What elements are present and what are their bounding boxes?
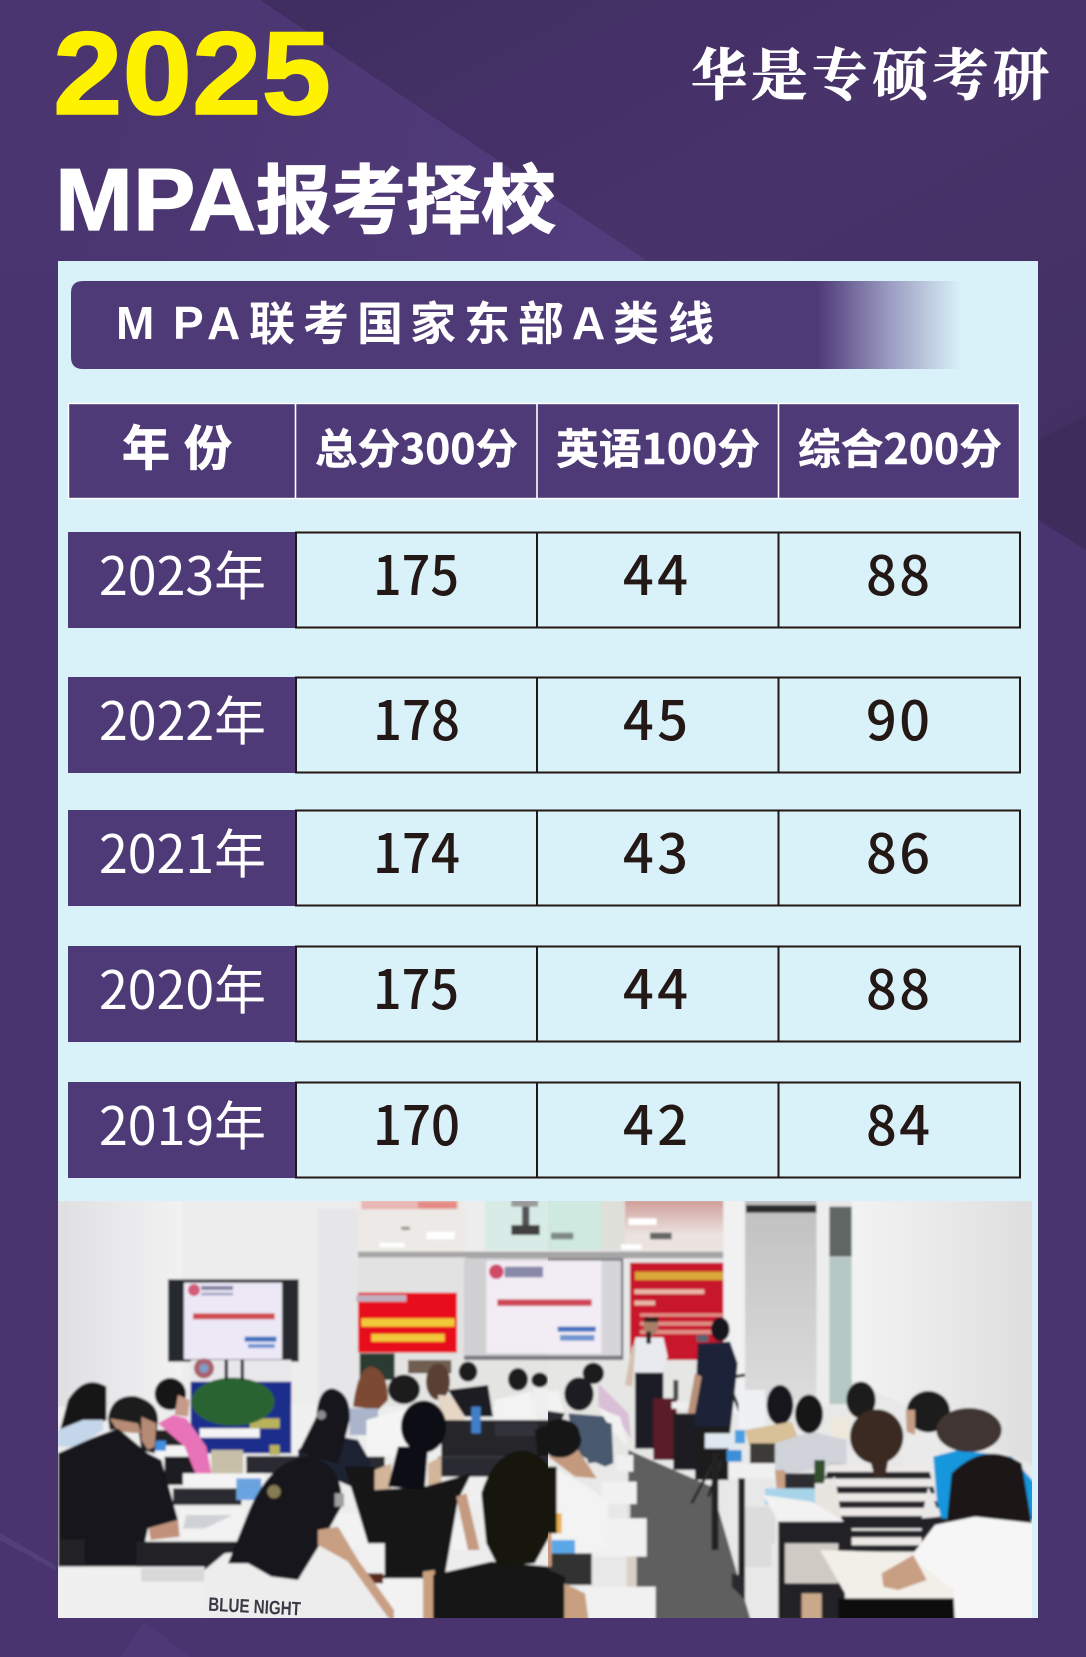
side frames — [712, 1453, 718, 1550]
near man in white shirt — [542, 1467, 608, 1553]
main title: MPA — [55, 150, 256, 249]
front-left desks — [617, 1455, 633, 1472]
section title text: MPA — [116, 297, 240, 349]
shirt print: BLUE NIGHT — [208, 1595, 302, 1621]
row: 2021: 174 — [373, 810, 460, 889]
panel: light background — [58, 261, 1038, 1618]
section title text: A — [572, 297, 605, 349]
row: 2023: 2023年 — [99, 535, 266, 611]
header: year: 年份 — [122, 409, 232, 479]
row: 2022: 45 — [623, 677, 688, 756]
header: total: 总分300分 — [315, 416, 518, 477]
row: 2021: 43 — [623, 810, 688, 889]
middle woman in black — [375, 1463, 391, 1490]
background attendees — [353, 1367, 388, 1410]
table header — [68, 403, 1020, 499]
front center woman — [423, 1570, 436, 1623]
row: 2022: 2022年 — [99, 680, 266, 756]
row: 2022 — [68, 677, 1020, 773]
row: 2019: 42 — [623, 1082, 688, 1161]
speaker — [625, 1317, 668, 1449]
row: 2022: 90 — [866, 677, 930, 756]
front right woman and desk — [820, 1550, 956, 1599]
floor — [628, 1450, 752, 1623]
red banner — [358, 1293, 457, 1353]
back attendees — [583, 1363, 604, 1384]
header: english: 英语100分 — [556, 416, 760, 477]
front left woman — [200, 1547, 388, 1623]
projection screen — [464, 1258, 551, 1360]
row: 2020: 44 — [623, 946, 688, 1025]
row: 2019: 170 — [373, 1082, 460, 1161]
photo left half: screens and left-side attendees — [58, 1201, 548, 1621]
back wall lower — [358, 1360, 551, 1407]
main title — [55, 150, 556, 249]
row: 2022: 178 — [373, 677, 460, 756]
main title: 报考择校 — [256, 159, 556, 243]
desks rear-left — [200, 1428, 260, 1438]
row: 2019: 2019年 — [99, 1085, 266, 1161]
cup on desk — [358, 1543, 385, 1575]
woman with floral clip — [298, 1433, 371, 1487]
section title text: 类线 — [613, 298, 714, 350]
row: 2023 — [68, 532, 1020, 628]
row: 2020: 2020年 — [99, 949, 266, 1025]
row: 2021: 86 — [866, 810, 930, 889]
row: 2020: 175 — [373, 946, 459, 1025]
row: 2019 — [68, 1082, 1020, 1178]
photo: classroom seminar — [55, 1197, 1042, 1627]
row: 2023: 175 — [373, 532, 459, 611]
rollup and plant — [191, 1360, 291, 1383]
photo right half: speaker and right-side attendees — [548, 1201, 1032, 1618]
row: 2023: 44 — [623, 532, 688, 611]
chairs and desks middle — [246, 1456, 385, 1473]
rear left attendees — [60, 1382, 106, 1433]
row: 2020 — [68, 946, 1020, 1042]
wall TV — [168, 1279, 299, 1362]
row: 2023: 88 — [866, 532, 930, 611]
row: 2020: 88 — [866, 946, 930, 1025]
row: 2019: 84 — [866, 1082, 930, 1161]
row: 2021 — [68, 810, 1020, 906]
section title text: 联考国家东部 — [249, 298, 564, 350]
year heading: 2025 — [53, 8, 331, 140]
section title bar — [71, 281, 960, 369]
header: composite: 综合200分 — [798, 416, 1002, 477]
brand name: 华是专硕考研 — [691, 32, 1049, 112]
row: 2021: 2021年 — [99, 813, 266, 889]
right attendees — [738, 1390, 765, 1430]
lectern and cameraman — [653, 1317, 745, 1503]
big man in black — [108, 1396, 158, 1453]
